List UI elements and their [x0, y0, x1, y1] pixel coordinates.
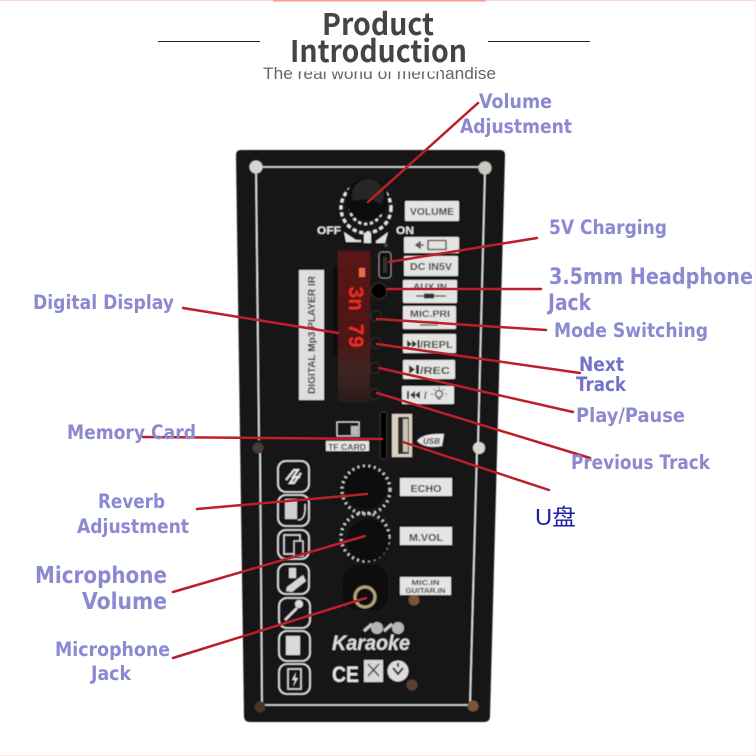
label: DC IN 5V: DC IN5V — [410, 262, 452, 273]
label: U disk: U盘 — [535, 504, 576, 530]
volume knob — [317, 178, 414, 243]
TF card slot and label — [326, 412, 387, 459]
panel screws — [250, 160, 492, 712]
callout line: mode switching — [377, 319, 546, 330]
label: Previous Track: Previous Track — [571, 451, 711, 474]
label: previous / light — [402, 386, 454, 404]
label: Volume Adjustment: Volume — [479, 90, 552, 113]
label: M.VOL — [400, 527, 452, 545]
USB port — [392, 414, 444, 457]
title: Product Introduction — [290, 0, 467, 71]
callout line: volume — [368, 103, 478, 202]
label: 5V Charging: 5V Charging — [549, 216, 667, 239]
button: next — [370, 338, 382, 348]
label: Microphone Jack: Microphone — [55, 638, 170, 661]
label: Next Track: Next — [579, 353, 624, 376]
microphone volume knob — [341, 513, 389, 561]
label: Microphone Jack: Jack — [89, 662, 132, 685]
Karaoke logo — [332, 622, 410, 655]
aux jack — [371, 283, 387, 299]
label: M.VOL: M.VOL — [409, 532, 444, 544]
label: Microphone Volume: Microphone — [35, 563, 167, 589]
label: 3.5mm Headphone Jack: Jack — [546, 291, 592, 316]
callout line: play/pause — [379, 368, 573, 412]
label: Microphone Volume — [35, 563, 167, 615]
button: previous — [370, 388, 380, 400]
label: AUX IN: AUX IN — [413, 282, 447, 293]
callout line: headphone jack — [387, 288, 541, 290]
label: Volume Adjustment: Adjustment — [460, 115, 572, 138]
label: Next Track: Track — [576, 373, 627, 396]
micro USB port — [379, 243, 391, 278]
label: ECHO: ECHO — [410, 483, 442, 495]
label: VOLUME: VOLUME — [410, 206, 454, 218]
certification marks — [332, 660, 408, 687]
digital display — [333, 251, 370, 402]
side label: DIGITAL Mp3 PLAYER IR: DIGITAL Mp3 PLAYER IR — [306, 276, 318, 394]
label: MIC.PRI — [403, 306, 456, 329]
label: Reverb Adjustment — [77, 490, 189, 538]
label: Digital Display: Digital Display — [33, 291, 174, 314]
label: VOLUME — [405, 201, 459, 221]
certification marks: CE — [332, 662, 359, 687]
callout line: next track — [377, 344, 580, 373]
reverb knob — [342, 466, 390, 514]
label: AUX IN — [403, 280, 457, 303]
label: Reverb Adjustment: Reverb — [98, 490, 165, 513]
Karaoke logo: Karaoke — [332, 632, 410, 655]
callout line: microphone volume — [173, 536, 365, 592]
label: play / REC: /REC — [420, 366, 450, 377]
label: MIC.IN GUITAR.IN: MIC.IN — [412, 580, 440, 587]
title rule left — [158, 40, 260, 42]
label: ECHO — [400, 478, 452, 496]
title: Product Introduction: Product — [322, 0, 434, 44]
label: MIC.IN GUITAR.IN: GUITAR.IN — [406, 588, 446, 595]
USB port: USB — [423, 437, 440, 446]
label: next / REPL — [403, 334, 456, 353]
icon column — [278, 461, 310, 694]
label: Reverb Adjustment: Adjustment — [77, 515, 189, 538]
label: Next Track — [576, 353, 627, 396]
title rule right — [488, 40, 590, 42]
label: Microphone Volume: Volume — [82, 589, 167, 615]
side label: DIGITAL Mp3 PLAYER IR — [299, 270, 324, 400]
label: 3.5mm Headphone Jack — [546, 265, 753, 316]
callout line: U disk — [403, 442, 549, 490]
callout line: 5V charging — [389, 238, 537, 262]
button: mode — [370, 310, 382, 322]
label: previous / light: / — [424, 391, 427, 402]
subtitle: The real world of merchandise — [263, 65, 496, 83]
callout line: reverb — [197, 494, 367, 509]
callout line: previous track — [377, 393, 590, 458]
label: Volume Adjustment — [460, 90, 572, 138]
microphone jack — [342, 565, 388, 610]
panel: control board — [236, 150, 505, 722]
callout line: microphone jack — [173, 598, 366, 658]
TF card slot and label: TF CARD — [328, 442, 366, 452]
volume knob: ON — [396, 225, 414, 237]
callout line: digital display — [183, 308, 338, 333]
label: play / REC — [403, 360, 455, 379]
label: Play/Pause: Play/Pause — [576, 404, 685, 427]
title: Product Introduction: Introduction — [290, 27, 467, 71]
digital display: 3n 79 — [342, 286, 367, 348]
label: MIC.IN GUITAR.IN — [400, 577, 451, 595]
volume knob: OFF — [317, 225, 341, 237]
label: Memory Card: Memory Card — [67, 421, 196, 444]
label: MIC.PRI: MIC.PRI — [410, 309, 450, 320]
label: Microphone Jack — [55, 638, 170, 685]
label: DC IN 5V — [404, 237, 459, 276]
button: play — [370, 362, 380, 374]
callout line: memory card — [143, 437, 382, 439]
label: Mode Switching: Mode Switching — [554, 319, 708, 342]
label: next / REPL: /REPL — [420, 340, 453, 351]
